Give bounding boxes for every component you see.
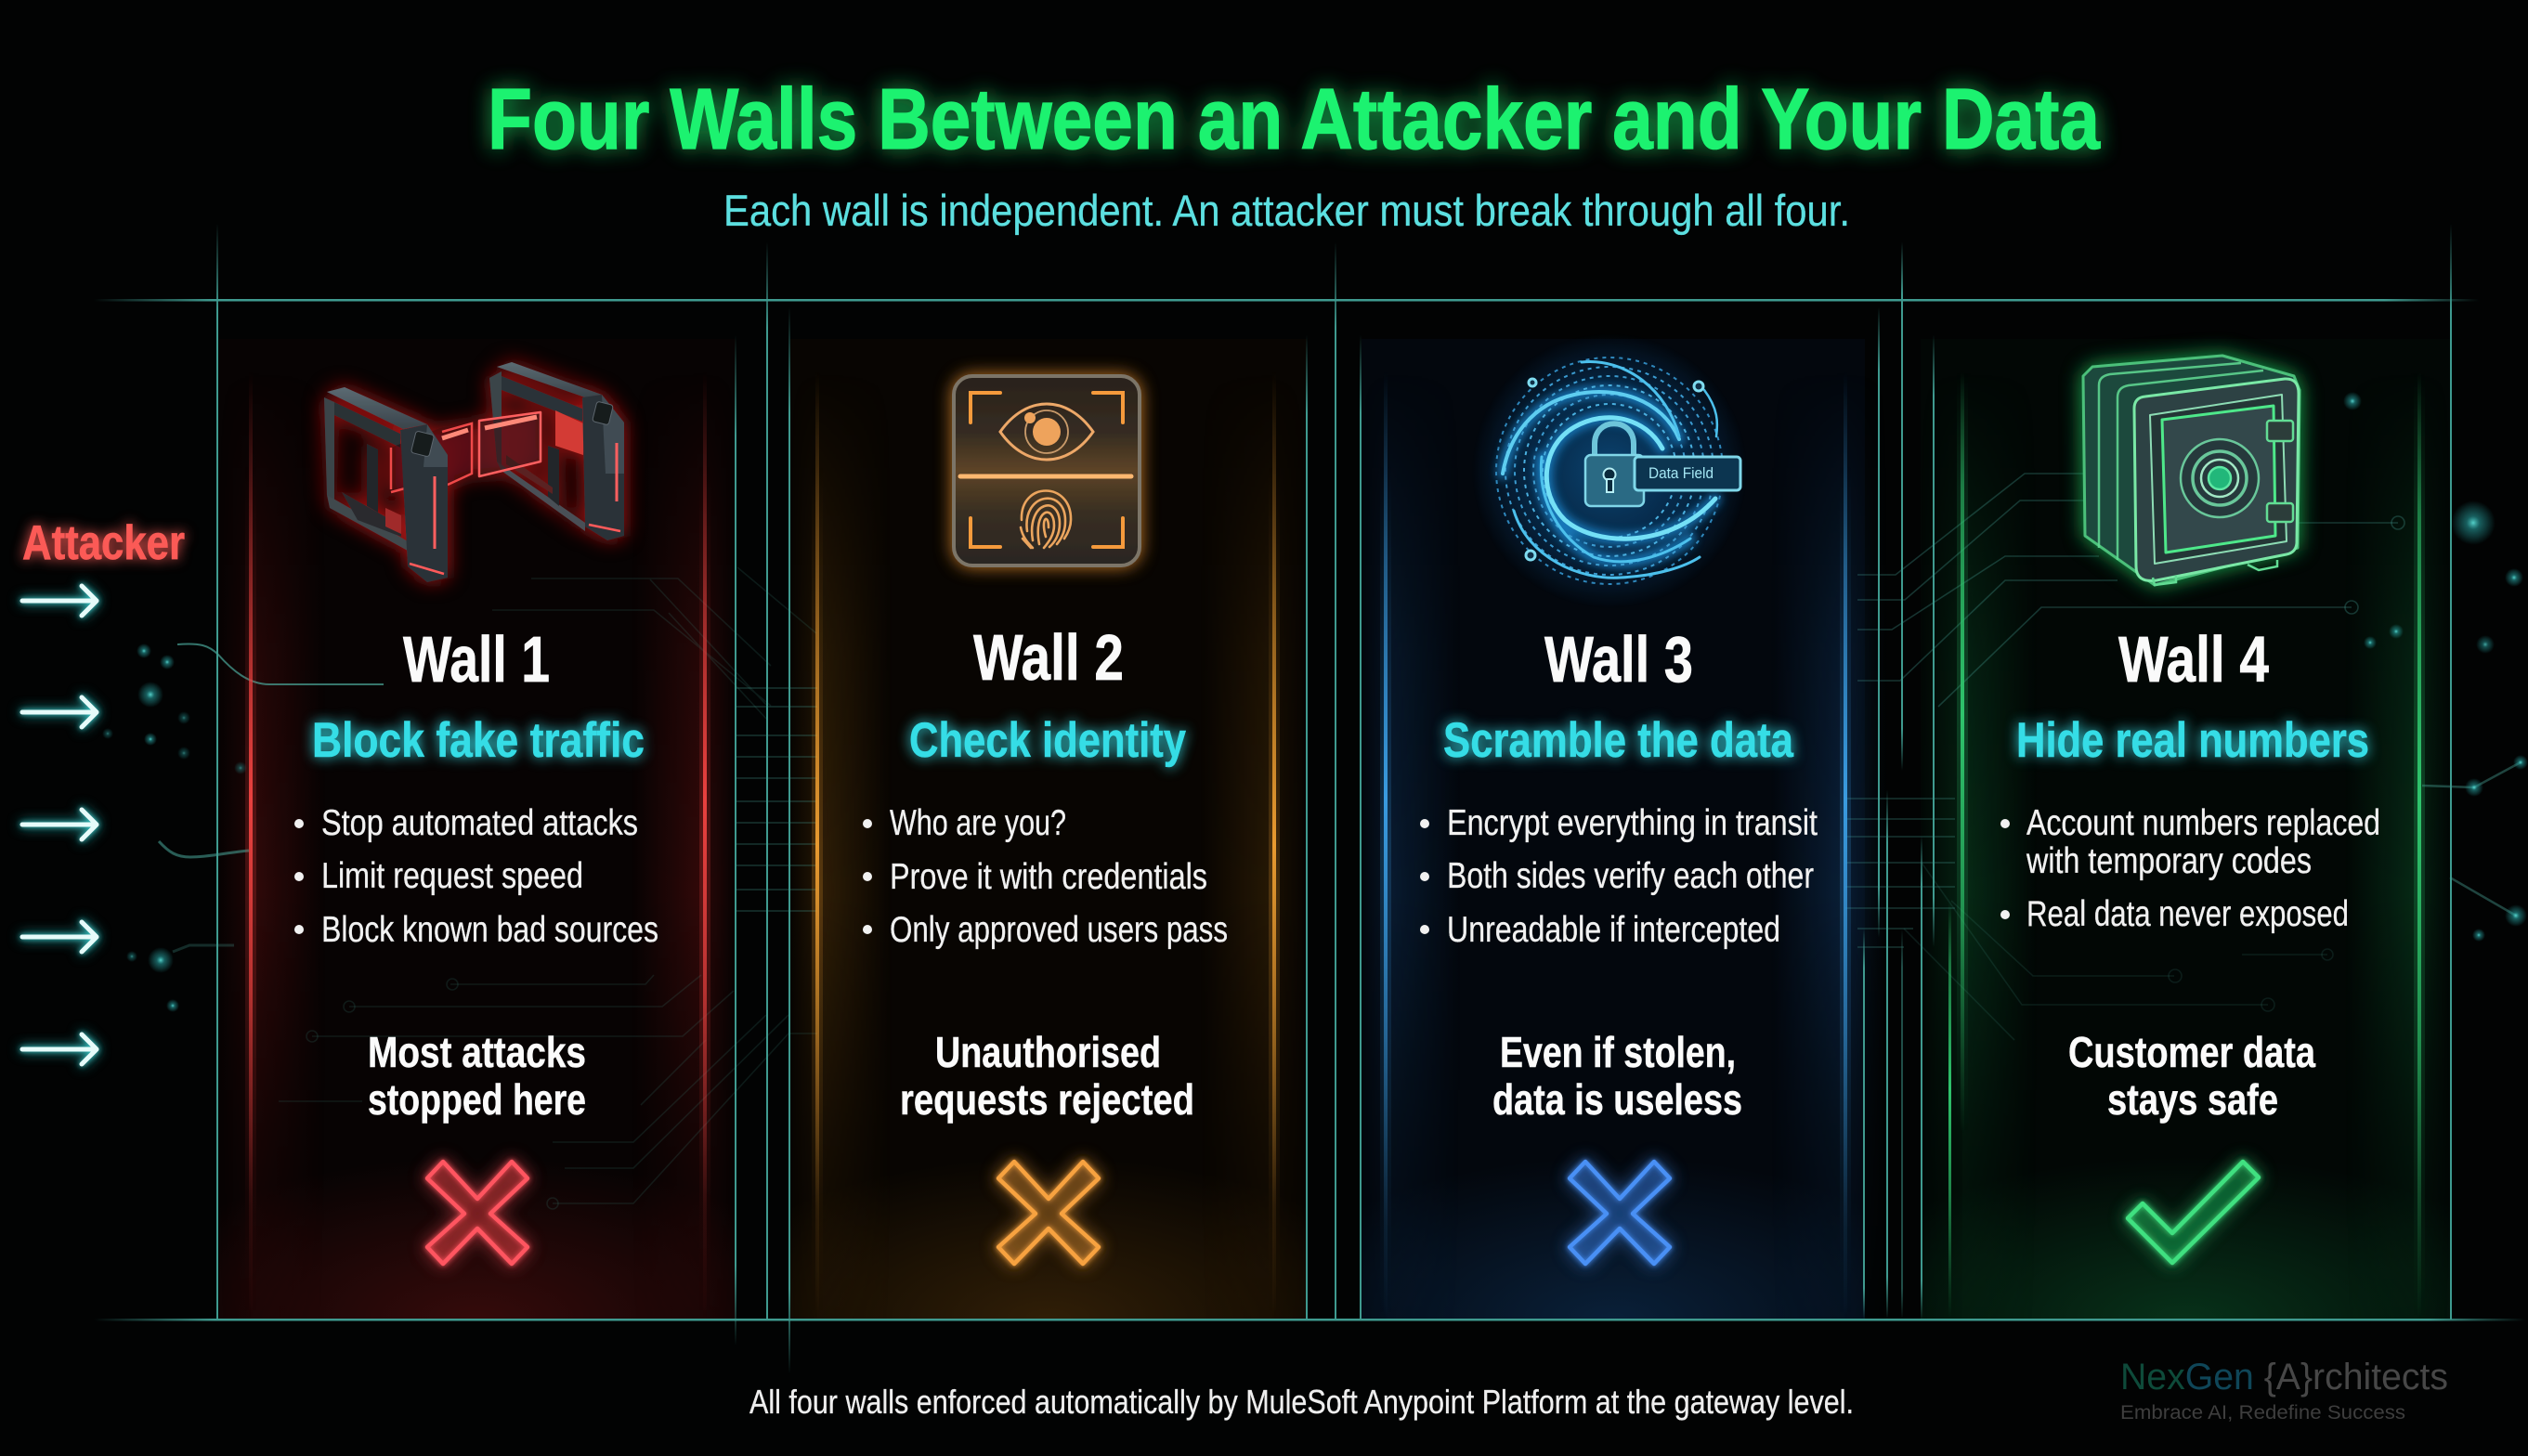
wall 1 bullets: Limit request speed (321, 856, 583, 896)
wall 3 bullets: Both sides verify each other (1447, 856, 1814, 896)
wall 2 bullets: Who are you? (890, 803, 1066, 843)
left gate rear (324, 397, 408, 551)
data field tag: Data Field (1648, 464, 1714, 482)
panel: wall 3 background (1362, 339, 1887, 1320)
wall 2 bullets (863, 803, 1228, 950)
wall 1 conclusion: stopped here (368, 1075, 586, 1124)
padlock (1585, 423, 1644, 506)
attacker label: Attacker (22, 516, 185, 570)
data field tag (1635, 457, 1740, 490)
arrow 2 (22, 697, 97, 727)
wall 1 bullets: Stop automated attacks (321, 803, 638, 843)
title: Four Walls Between an Attacker and Your Data (488, 71, 2101, 167)
arrow 3 (22, 810, 97, 839)
wall 3 bullets (1420, 803, 1818, 950)
wall 2 bullets: Only approved users pass (890, 910, 1228, 950)
wall 2 conclusion: Unauthorised (935, 1028, 1161, 1076)
particles (102, 392, 2528, 1012)
logo (2120, 1357, 2448, 1424)
icon: layered safe (2083, 356, 2300, 585)
wall 4 bullets: Account numbers replaced (2026, 803, 2380, 843)
eye pupil (1024, 412, 1061, 446)
wall 2 subheading: Check identity (909, 713, 1186, 768)
icon: orange cross (998, 1162, 1099, 1264)
wall 4 bullets: with temporary codes (2026, 841, 2312, 881)
panel: wall 2 background (790, 339, 1307, 1320)
arrow 4 (22, 922, 97, 952)
wall 4 subheading: Hide real numbers (2016, 713, 2369, 768)
frame lines (93, 223, 2526, 1374)
footer note: All four walls enforced automatically by MuleSoft Anypoint Platform at the gateway level. (749, 1383, 1854, 1421)
wall 2 conclusion (900, 1028, 1194, 1124)
wall 3 conclusion: data is useless (1492, 1075, 1742, 1124)
arrow 5 (22, 1034, 97, 1064)
coloured wall edges (245, 371, 2425, 1320)
icon: turnstile gate (324, 362, 624, 582)
wall 1 conclusion (368, 1028, 586, 1124)
safe dial (2181, 439, 2259, 517)
arrow 1 (22, 586, 97, 616)
wall 2 conclusion: requests rejected (900, 1075, 1194, 1124)
right gate front (497, 362, 624, 540)
wall 1 bullets: Block known bad sources (321, 910, 658, 950)
wall 3 bullets: Encrypt everything in transit (1447, 803, 1818, 843)
spiral nodes (1526, 379, 1703, 560)
left glass barrier (391, 423, 472, 492)
right glass barrier (479, 412, 541, 476)
wall 3 bullets: Unreadable if intercepted (1447, 910, 1780, 950)
logo: Embrace AI, Redefine Success (2120, 1402, 2405, 1424)
wall 4 conclusion: stays safe (2107, 1075, 2278, 1124)
wall 1 heading: Wall 1 (403, 623, 550, 696)
safe door (2150, 395, 2287, 564)
wall 4 bullets: Real data never exposed (2026, 894, 2349, 934)
panel: wall 4 background (1921, 339, 2450, 1320)
wall 3 conclusion (1492, 1028, 1742, 1124)
wall 2 heading: Wall 2 (973, 621, 1124, 694)
wall 3 heading: Wall 3 (1544, 623, 1693, 696)
fingerprint (1021, 490, 1071, 548)
panel: wall 1 background (219, 339, 736, 1320)
left gate front (327, 387, 448, 582)
wall 1 conclusion: Most attacks (368, 1028, 586, 1076)
wall 1 bullets (294, 803, 658, 950)
icon: blue cross (1570, 1162, 1670, 1264)
attacker arrows (22, 586, 97, 1064)
right gate rear (489, 371, 585, 531)
wall 4 heading: Wall 4 (2118, 623, 2269, 696)
wall 1 subheading: Block fake traffic (312, 713, 645, 768)
circuit traces (159, 474, 2521, 1209)
wall 4 conclusion: Customer data (2068, 1028, 2315, 1076)
wall 3 conclusion: Even if stolen, (1500, 1028, 1736, 1076)
logo: NexGen {A}rchitects (2120, 1357, 2448, 1398)
wall 2 bullets: Prove it with credentials (890, 857, 1207, 897)
safe hinges (2267, 421, 2293, 522)
icon: encrypted lock spiral (1472, 333, 1747, 608)
subtitle: Each wall is independent. An attacker must break through all four. (723, 186, 1850, 235)
icon: green check (2128, 1162, 2259, 1263)
wall 4 bullets (2000, 803, 2380, 934)
icon: eye and fingerprint scanner (954, 376, 1140, 566)
wall 3 subheading: Scramble the data (1443, 713, 1793, 768)
icon: red cross (427, 1162, 528, 1264)
safe feet (2153, 560, 2277, 585)
wall 4 conclusion (2068, 1028, 2315, 1124)
